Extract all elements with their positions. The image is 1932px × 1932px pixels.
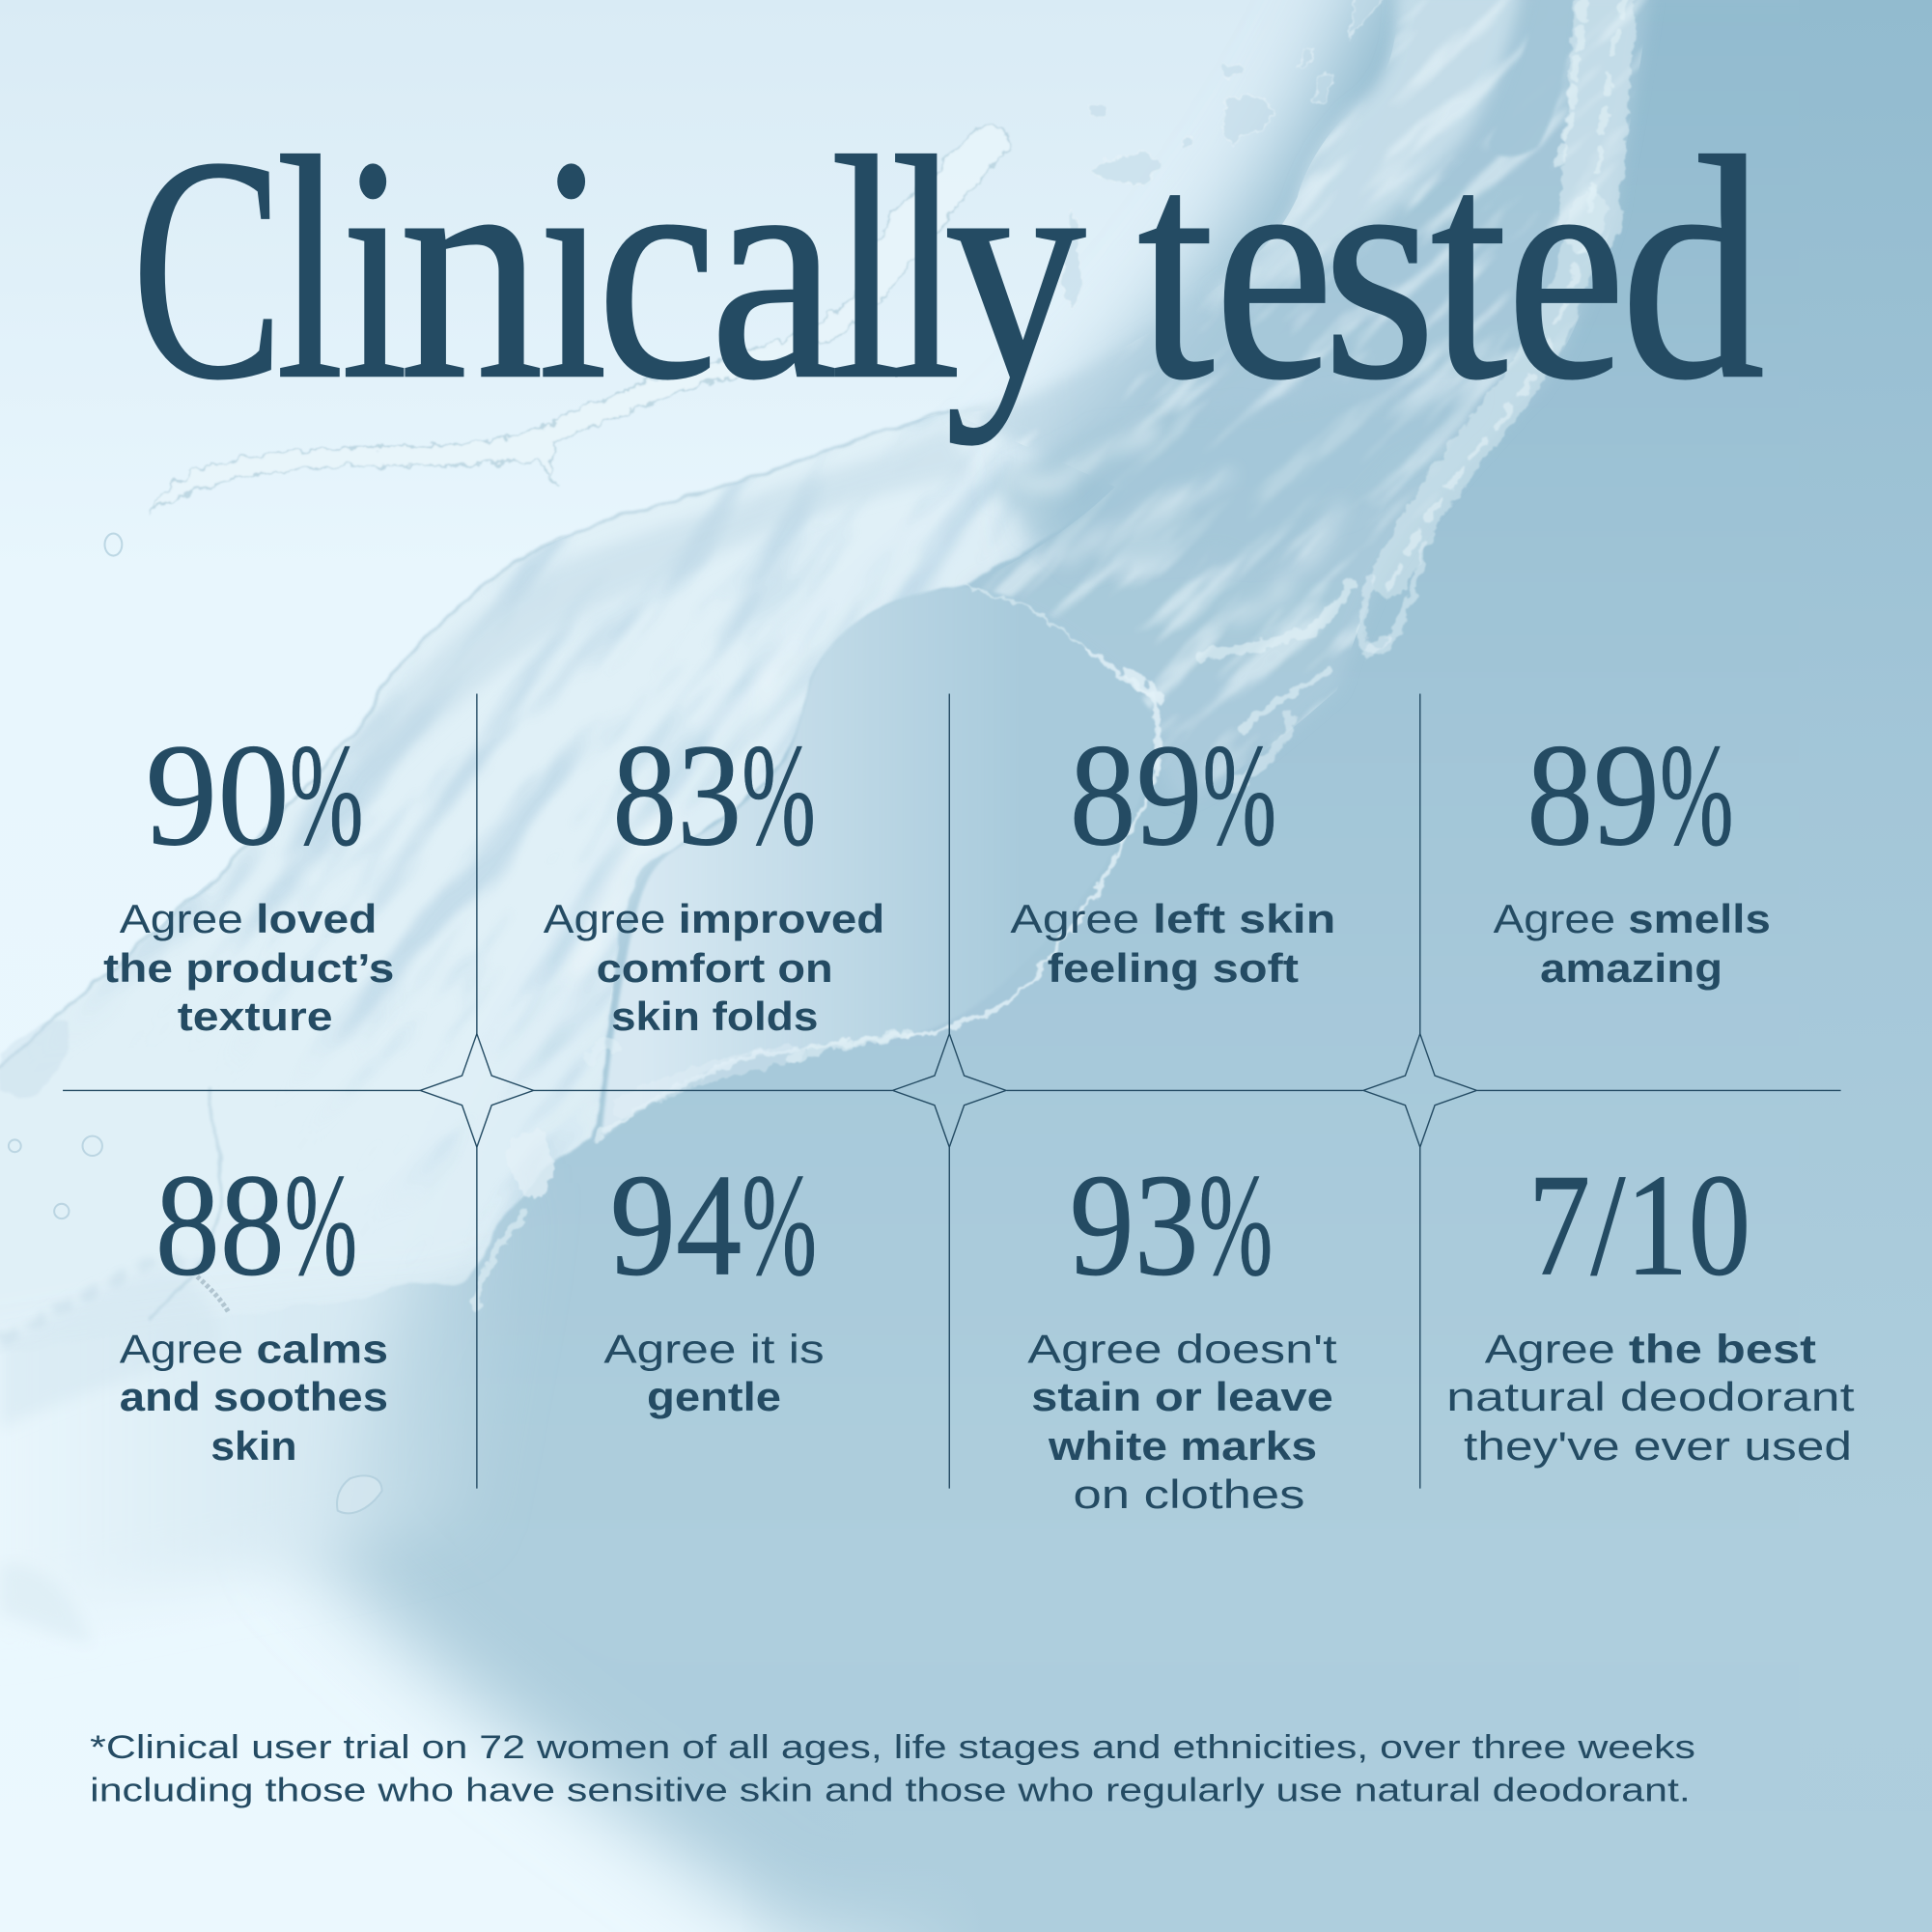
stat: 88% calms and soothes: skin [210, 1423, 297, 1469]
splash: inner edge soft shade [352, 425, 973, 789]
stat: 89% smells amazing: amazing [1540, 945, 1722, 991]
stat: 90% loved texture [103, 714, 394, 1039]
stat: 83% comfort on skin folds: skin folds [611, 994, 818, 1039]
title: i [539, 92, 607, 445]
foam band and streaks [474, 0, 1627, 1306]
stat: 89% smells amazing: Agree smells [1494, 896, 1771, 941]
icon: four-point star [1363, 1034, 1476, 1147]
icon: four-point star [420, 1034, 534, 1147]
title: e [1506, 92, 1626, 445]
stat: 93% no white marks: on clothes [1074, 1471, 1304, 1517]
title: d [1620, 92, 1765, 445]
splash: streak mottling [102, 414, 1012, 1217]
footnote [90, 1729, 1695, 1809]
stat: 90% loved texture: texture [178, 994, 333, 1039]
soft white streaks [579, 425, 1343, 973]
stat: 94% gentle: gentle [647, 1374, 781, 1419]
deep blue field: bottom edge [740, 1811, 1932, 1932]
stat: 88% calms and soothes: % [285, 1144, 357, 1306]
stat: 7/10 best natural deodorant [1446, 1144, 1855, 1469]
stat: 7/10 best natural deodorant: 7/10 [1527, 1144, 1750, 1306]
stat: 94% gentle: % [742, 1144, 817, 1306]
stat: 88% calms and soothes: 88 [155, 1144, 285, 1306]
stat: 89% left skin soft: % [1203, 714, 1276, 876]
stat: 7/10 best natural deodorant: Agree the best [1485, 1326, 1816, 1371]
stat: 93% no white marks: stain or leave [1031, 1374, 1333, 1419]
title: a [710, 92, 838, 445]
title: l [276, 92, 344, 445]
inner shadows [986, 394, 1478, 564]
dome pool [602, 586, 1159, 1138]
stat: 90% loved texture: the product’s [103, 945, 394, 991]
stat: 89% left skin soft: Agree left skin [1010, 896, 1335, 941]
stat: 89% smells amazing [1494, 714, 1771, 991]
title: c [597, 92, 717, 445]
lower-left lobes [0, 1269, 222, 1645]
stat: 90% loved texture: 90 [146, 714, 290, 876]
stat: 83% comfort on skin folds: 83 [612, 714, 742, 876]
icon: four-point star [893, 1034, 1006, 1147]
stat: 89% smells amazing: % [1660, 714, 1734, 876]
title: i [341, 92, 407, 445]
upper right translucent splash [949, 0, 1651, 800]
stat: 89% left skin soft: 89 [1070, 714, 1203, 876]
stat: 83% comfort on skin folds: Agree improved [544, 896, 884, 941]
right splash: white streaks [974, 0, 1647, 782]
stat: 93% no white marks: white marks [1048, 1423, 1317, 1469]
title: s [1322, 92, 1437, 445]
stat: 93% no white marks: % [1199, 1144, 1273, 1306]
stat: 83% comfort on skin folds: comfort on [597, 945, 833, 991]
droplets top [1062, 0, 1392, 308]
splash: translucent light body [0, 409, 1055, 1310]
title [131, 92, 1765, 446]
deep blue field: right edge [1799, 0, 1932, 1932]
stat: 88% calms and soothes [120, 1144, 388, 1469]
stat: 94% gentle: Agree it is [603, 1326, 825, 1371]
droplet shapes [9, 534, 382, 1513]
stat: 94% gentle: 94 [610, 1144, 742, 1306]
title: y [944, 92, 1086, 446]
splash: upper edge line [0, 411, 949, 1078]
stat: 90% loved texture: % [290, 714, 363, 876]
stat: 7/10 best natural deodorant: natural deodorant [1446, 1374, 1855, 1419]
stat: 89% smells amazing: 89 [1526, 714, 1660, 876]
stat: 93% no white marks: 93 [1070, 1144, 1199, 1306]
grid lines and star dividers [63, 693, 1841, 1489]
soft lower-left light wash [0, 1183, 543, 1627]
thin left streak [153, 126, 1010, 510]
title: C [131, 92, 284, 445]
stat: 93% no white marks [1027, 1144, 1337, 1517]
title: t [1431, 92, 1508, 445]
title: l [891, 92, 961, 445]
stat: 88% calms and soothes: and soothes [120, 1374, 388, 1419]
title: t [1137, 92, 1216, 445]
footnote: including those who have sensitive skin and those who regularly use natural deodorant. [90, 1773, 1691, 1809]
stat: 93% no white marks: Agree doesn't [1027, 1326, 1337, 1371]
title: l [830, 92, 902, 445]
title: e [1215, 92, 1333, 445]
footnote: *Clinical user trial on 72 women of all ages, life stages and ethnicities, over three weeks [90, 1729, 1695, 1766]
stat: 94% gentle [603, 1144, 825, 1419]
stat: 90% loved texture: Agree loved [120, 896, 378, 941]
title: n [399, 92, 544, 445]
stat: 83% comfort on skin folds [544, 714, 884, 1039]
lower-left foam [0, 1261, 204, 1340]
stat: 83% comfort on skin folds: % [742, 714, 816, 876]
stat: 89% left skin soft [1010, 714, 1335, 991]
top pool [1489, 0, 1575, 156]
stat: 88% calms and soothes: Agree calms [120, 1326, 388, 1371]
stat: 89% left skin soft: feeling soft [1048, 945, 1299, 991]
dome pool: light left fade [602, 586, 1109, 1138]
stat: 7/10 best natural deodorant: they've ever used [1464, 1423, 1852, 1469]
